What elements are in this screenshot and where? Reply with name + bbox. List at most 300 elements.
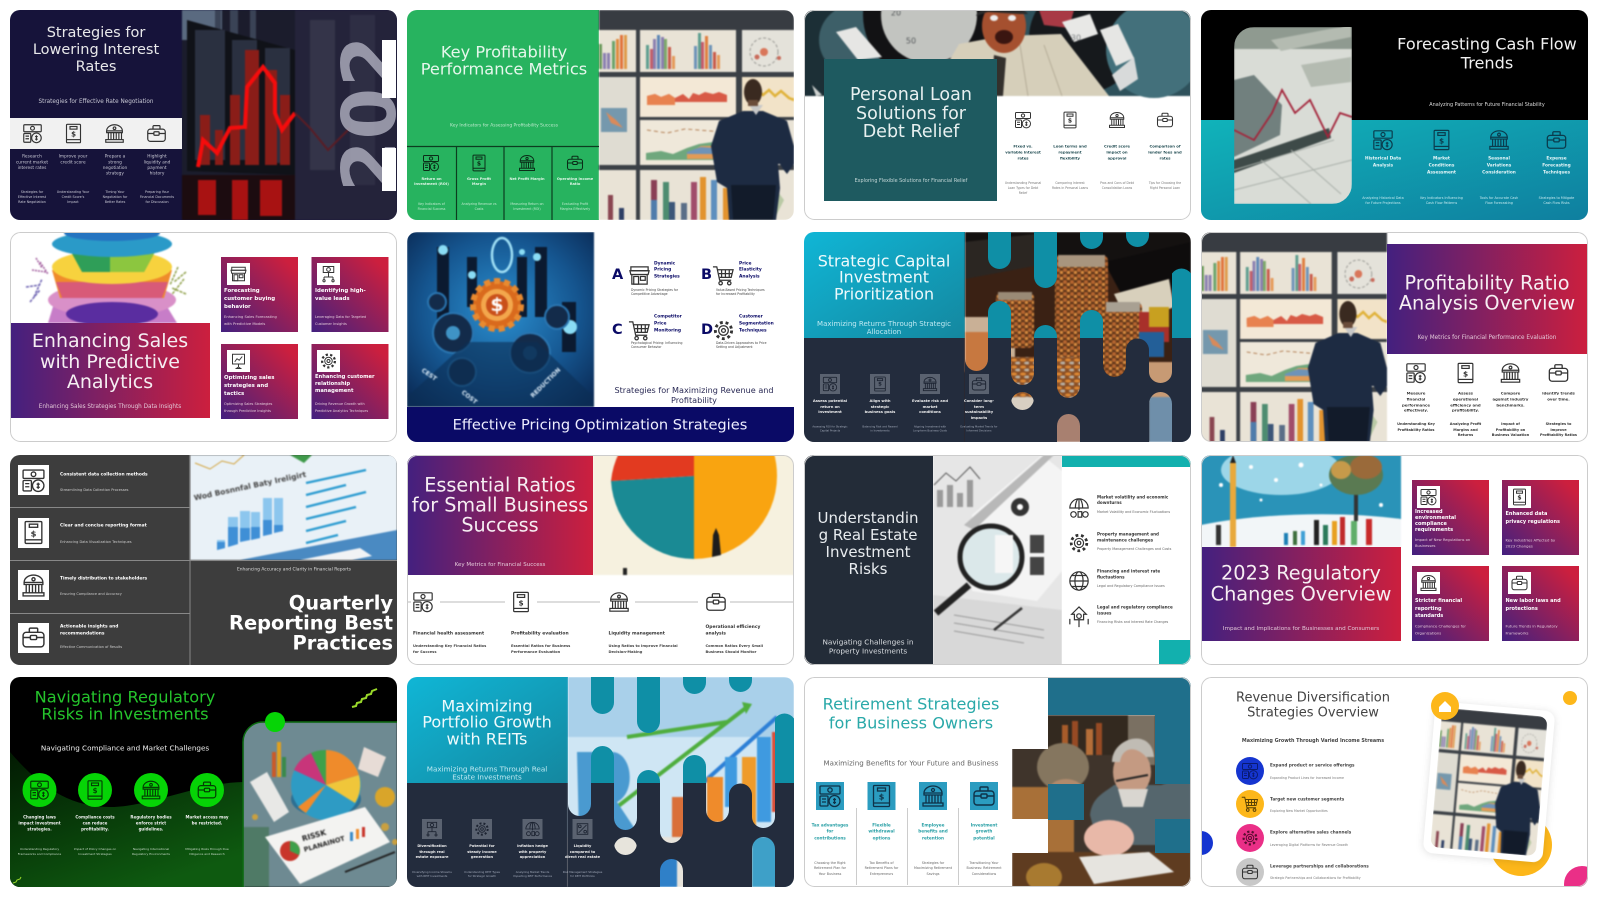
icon: book — [1458, 363, 1473, 383]
title: Prioritization — [834, 284, 934, 304]
icon: bank — [1501, 364, 1520, 382]
panel: 2023 Regulatory Changes Overview — [1201, 455, 1588, 665]
caption: Relief — [1019, 191, 1028, 195]
step: profitability — [511, 592, 570, 654]
timeline connectors — [407, 601, 794, 603]
item: access — [185, 773, 229, 856]
label: Analysis — [1373, 162, 1394, 168]
icon box — [522, 819, 542, 839]
caption — [1362, 196, 1404, 205]
icon: store — [630, 267, 649, 284]
icon: bank — [923, 786, 943, 806]
caption — [224, 402, 273, 413]
title: Debt Relief — [863, 122, 960, 142]
icon: money — [424, 156, 438, 171]
label: Measure — [1407, 390, 1426, 396]
label — [1506, 598, 1561, 612]
icon: briefcase — [198, 782, 216, 798]
icon: gear — [1244, 832, 1256, 844]
subtitle: Impact and Implications for Businesses and Consumers — [1223, 626, 1379, 632]
label — [971, 822, 997, 840]
panel: Effective Pricing Optimization Strategies — [407, 232, 794, 442]
caption: Financing Risks and Interest Rate Changes — [1097, 620, 1169, 624]
label: through real — [419, 850, 445, 854]
label: Monitoring — [654, 328, 681, 334]
icon: cart — [629, 322, 649, 340]
caption — [412, 870, 452, 878]
item: market — [1420, 130, 1463, 205]
item: employee — [914, 782, 953, 876]
label: be restricted. — [192, 820, 223, 826]
card: relationships — [312, 344, 388, 419]
caption — [315, 402, 368, 413]
icon box — [868, 782, 896, 810]
title: Practices — [293, 632, 393, 654]
caption: Predictive Analytics Techniques — [315, 409, 368, 413]
pill overlay — [568, 677, 794, 887]
caption: Retirement Plans for — [865, 866, 899, 870]
label: requirements — [1415, 527, 1453, 533]
item: withdrawal — [865, 782, 899, 876]
label — [315, 374, 375, 394]
caption: Understanding Key — [1397, 422, 1436, 426]
title: Navigating Regulatory — [35, 688, 216, 706]
icon: money — [820, 786, 840, 806]
icon: book — [88, 781, 102, 799]
label — [1148, 144, 1182, 160]
caption: Margins and — [1453, 428, 1478, 432]
title — [850, 85, 972, 142]
label: benefits and — [918, 828, 948, 834]
icon: money — [23, 470, 44, 491]
icon: money — [414, 593, 432, 612]
subtitle: Navigating Compliance and Market Challenges — [41, 744, 209, 752]
label: Align with — [870, 399, 891, 403]
card: optimizing — [221, 344, 298, 419]
caption: Choosing the Right — [814, 861, 846, 865]
caption: Profitability Ratios — [1540, 433, 1577, 437]
label: Techniques — [1543, 170, 1570, 176]
subtitle: Maximizing Benefits for Your Future and Business — [824, 758, 999, 768]
label — [18, 814, 61, 832]
subtitle: Navigating Challenges in — [822, 638, 914, 646]
caption: Measuring Return on — [510, 202, 544, 206]
label: repayment — [1058, 150, 1082, 154]
icon: briefcase — [568, 156, 582, 170]
icon box — [870, 374, 890, 394]
label — [868, 822, 895, 840]
label: downturns — [1097, 500, 1122, 505]
item: segments — [1236, 790, 1345, 818]
label — [59, 154, 88, 166]
item: income — [464, 819, 501, 878]
caption — [185, 847, 229, 856]
label: compared to — [570, 850, 596, 854]
title: with Predictive — [40, 351, 180, 373]
decorative circle: yellow dot — [1563, 691, 1577, 705]
caption — [716, 341, 767, 349]
icon: gear hand — [1071, 535, 1087, 551]
label: profitability. — [1452, 408, 1480, 412]
label: Enhanced data — [1506, 511, 1547, 517]
title: Profitability Ratio — [1404, 272, 1570, 294]
panel: Strategic Capital Investment Prioritization — [804, 232, 1191, 442]
caption: Competitive Advantage — [631, 292, 668, 296]
label: conditions — [919, 410, 942, 414]
label — [1542, 156, 1571, 176]
label: Improve your — [59, 154, 88, 160]
title: Effective Pricing Optimization Strategies — [453, 416, 747, 434]
label: Market — [1433, 156, 1450, 162]
label: Strategies — [654, 274, 680, 280]
caption: Analyzing Market Trends — [516, 870, 550, 874]
label: Regulatory bodies — [130, 814, 172, 820]
label: strong — [108, 160, 122, 166]
title: 2023 Regulatory — [1221, 562, 1381, 584]
icon: gear — [476, 823, 488, 835]
caption — [224, 315, 277, 326]
label: Variations — [1487, 162, 1512, 168]
icon box — [920, 374, 940, 394]
title: Quarterly — [289, 592, 393, 614]
subtitle: Strategies for Effective Rate Negotiation — [38, 99, 154, 105]
caption — [1415, 624, 1466, 636]
caption: Key Indicators Influencing — [1420, 196, 1463, 200]
letter: C — [612, 322, 623, 338]
icon: money — [1016, 112, 1030, 128]
item: research rates — [16, 125, 48, 204]
item: measure — [1397, 364, 1436, 432]
title — [412, 474, 588, 536]
label — [812, 822, 849, 840]
caption — [18, 847, 61, 856]
caption — [862, 424, 898, 432]
label: Compliance costs — [75, 814, 115, 820]
caption — [966, 861, 1002, 876]
caption: Understanding Your — [57, 190, 90, 194]
caption — [1479, 196, 1518, 205]
caption: Investment Strategies — [78, 852, 112, 856]
caption — [140, 190, 174, 204]
photo: bar chart report: Wod Bosnnfal Baty Ireligirt — [193, 470, 307, 502]
caption — [462, 202, 497, 211]
column dividers — [856, 808, 958, 885]
illustration: gears and dollar sign: $ — [490, 294, 504, 316]
label: enforce strict — [136, 820, 166, 826]
label — [1402, 390, 1430, 412]
caption: for REIT Portfolios — [570, 874, 595, 878]
caption — [513, 870, 552, 878]
photo: man viewing chart wall — [599, 10, 794, 220]
label: Margin — [472, 182, 487, 186]
caption: Cash Flow Patterns — [1426, 201, 1457, 205]
grid item B — [701, 260, 765, 296]
label: Return on — [421, 177, 442, 181]
label: rates — [1017, 156, 1029, 160]
caption: Impact of Policy Changes on — [74, 847, 116, 851]
icon: book — [514, 592, 528, 612]
title — [1211, 562, 1391, 606]
item: terms — [1052, 112, 1088, 190]
label: Explore alternative sales channels — [1270, 830, 1352, 834]
caption: 2023 Changes — [1506, 544, 1533, 548]
badge: house icon — [1431, 692, 1459, 720]
icon disc — [1236, 858, 1264, 886]
label: Highlight — [147, 154, 167, 160]
decorative circle: blue — [1189, 831, 1213, 855]
step: liquidity — [608, 593, 678, 654]
label: generation — [471, 855, 494, 859]
title: Enhancing Sales — [32, 330, 188, 352]
icon: bank — [1110, 113, 1124, 128]
label: Leverage partnerships and collaborations — [1270, 864, 1369, 868]
card: leads — [312, 257, 388, 332]
caption — [960, 424, 999, 432]
icon disc — [22, 773, 56, 807]
caption — [413, 644, 486, 654]
title: Rates — [76, 59, 116, 75]
caption: Navigating International — [133, 847, 169, 851]
icon box — [227, 263, 250, 285]
title — [35, 688, 216, 724]
photo: risk planning desk: RISSK — [301, 827, 328, 843]
label: sustainability — [965, 410, 994, 414]
label: Conditions — [1429, 162, 1455, 168]
caption — [1148, 181, 1181, 190]
caption: Effective Communication of Results — [60, 645, 122, 649]
caption: Strategies to Mitigate — [1539, 196, 1574, 200]
label — [654, 314, 683, 334]
illustration: gears and dollar sign: REDUCTION — [530, 367, 562, 399]
label — [103, 154, 128, 176]
label — [1097, 604, 1173, 616]
panel: Enhancing Sales with Predictive Analytics — [10, 232, 397, 442]
caption: Maximizing Retirement — [914, 866, 953, 870]
label: Evaluate risk and — [912, 399, 948, 403]
label: strategies and — [224, 383, 268, 389]
label: Investment (ROI) — [414, 182, 449, 186]
icon: house dollar — [1070, 607, 1088, 627]
icon: money — [24, 125, 41, 143]
caption: Investment (ROI) — [513, 207, 541, 211]
label: Forecasting — [1542, 162, 1571, 168]
divider lines — [10, 455, 397, 665]
icon: briefcase — [148, 126, 165, 141]
caption — [563, 870, 603, 878]
photo: red stock chart on monitor with city behind — [182, 10, 397, 220]
caption: Using Ratios to Improve Financial — [608, 644, 678, 648]
caption — [18, 190, 47, 204]
caption: Customer Insights — [315, 322, 347, 326]
caption: Understanding Personal — [1005, 181, 1041, 185]
label: Price — [654, 320, 666, 326]
panel: Forecasting Cash Flow Trends — [1201, 10, 1588, 220]
label: financial — [1407, 396, 1425, 402]
caption: Analyzing Profit — [1450, 422, 1482, 426]
icon disc — [190, 773, 224, 807]
label: retention — [922, 836, 944, 840]
subtitle: Key Metrics for Financial Success — [455, 562, 545, 568]
caption: Long-term Business Goals — [913, 428, 948, 432]
label: Tax advantages — [812, 822, 849, 828]
caption: Common Ratios Every Small — [706, 644, 763, 648]
label — [964, 399, 995, 420]
label: return on — [820, 405, 840, 409]
caption: Impact of — [1501, 422, 1520, 426]
label: relationship — [315, 381, 350, 387]
metric cell dividers — [407, 146, 599, 220]
label: Assess — [1458, 390, 1474, 396]
label — [1053, 144, 1087, 160]
photo: winter scene with giant pencil and people — [1201, 445, 1401, 547]
title: with REITs — [447, 730, 527, 748]
caption — [132, 847, 170, 856]
label: Stricter financial — [1415, 598, 1462, 604]
caption: Business Should Monitor — [706, 650, 757, 654]
panel: Key Profitability Performance Metrics — [407, 10, 794, 220]
caption — [1450, 422, 1482, 437]
grid item A — [612, 260, 680, 296]
label: profitability. — [81, 826, 109, 832]
subtitle: Enhancing Sales Strategies Through Data Insights — [39, 404, 181, 410]
caption: Rates in Personal Loans — [1052, 186, 1088, 190]
icon box — [317, 350, 340, 372]
item: net margin — [509, 156, 545, 211]
item: ROI — [414, 156, 449, 211]
title block — [824, 59, 997, 201]
label — [416, 844, 449, 859]
white geometric blocks — [1004, 705, 1048, 887]
caption: Strategies to — [1546, 422, 1572, 426]
label — [1415, 598, 1462, 619]
caption: Risk Management Strategies — [563, 870, 603, 874]
photo: coin jars on table — [965, 232, 1191, 442]
label — [1097, 532, 1159, 542]
label: Assess potential — [813, 399, 847, 403]
title: Solutions for — [856, 104, 967, 124]
caption: Evaluating Profit — [562, 202, 589, 206]
item: risk — [912, 374, 948, 432]
icon: money — [823, 377, 837, 391]
item: investment — [966, 782, 1002, 876]
label: Historical Data — [1365, 156, 1401, 162]
label — [1415, 509, 1456, 533]
label: steady income — [467, 850, 497, 854]
caption: Effective Interest — [18, 195, 47, 199]
caption: Dynamic Pricing Strategies for — [631, 288, 679, 292]
photo: risk planning desk: PLANAINOT — [303, 834, 346, 854]
subtitle: Estate Investments — [452, 772, 522, 782]
subtitle: Profitability — [671, 395, 717, 405]
caption: Pros and Cons of Debt — [1100, 181, 1135, 185]
label: Diversification — [417, 844, 447, 848]
label — [144, 154, 171, 176]
item: seasonal — [1479, 131, 1518, 205]
item: long-term — [960, 374, 999, 432]
step: financial health — [413, 593, 486, 654]
label: Changing laws — [23, 814, 57, 820]
label: value leads — [315, 296, 350, 302]
caption: Impacting REIT Performance — [513, 874, 552, 878]
icon: bank — [142, 781, 160, 799]
icon box — [422, 819, 442, 839]
label: Research — [22, 154, 42, 160]
caption: through Predictive Insights — [224, 409, 271, 413]
label: Net Profit Margin — [509, 177, 545, 181]
title — [229, 592, 393, 654]
title — [32, 330, 188, 393]
label — [1542, 390, 1576, 402]
icon: briefcase — [1242, 865, 1258, 879]
icon box — [1508, 486, 1531, 508]
label: Market access may — [186, 814, 229, 820]
subtitle: Key Metrics for Financial Performance Evaluation — [1418, 335, 1557, 341]
risk: property management — [1071, 532, 1172, 551]
icon box — [1508, 572, 1531, 594]
title — [818, 252, 950, 304]
icon: briefcase — [707, 594, 725, 610]
title — [823, 694, 999, 732]
photo: man viewing chart wall — [1201, 232, 1387, 442]
caption — [1506, 624, 1558, 636]
corner block — [1159, 640, 1191, 665]
caption — [1540, 422, 1577, 437]
caption: Profitability Ratios — [1397, 428, 1435, 432]
framed photo: man viewing chart wall — [1423, 701, 1555, 863]
caption — [1415, 538, 1471, 548]
caption — [1397, 422, 1436, 432]
caption: Profitability on — [1496, 428, 1526, 432]
panel: Maximizing Portfolio Growth with REITs — [407, 677, 794, 887]
title: Key Profitability — [441, 42, 568, 62]
label: analysis — [706, 630, 726, 636]
caption: Key Indicators of — [418, 202, 446, 206]
label: Comparison of — [1150, 144, 1181, 148]
subtitle: Property Investments — [829, 646, 907, 656]
title: g Real Estate — [819, 526, 917, 544]
title block — [804, 455, 933, 665]
caption — [716, 288, 765, 296]
title block — [10, 323, 210, 418]
caption — [511, 644, 570, 654]
label: Seasonal — [1488, 156, 1510, 162]
caption: for Increased Profitability — [716, 292, 755, 296]
label: Customer — [739, 314, 764, 320]
label: performance — [1402, 402, 1430, 408]
caption: Strategies for — [21, 190, 44, 194]
title: Strategies Overview — [1247, 706, 1379, 720]
label — [739, 260, 762, 280]
caption — [1539, 196, 1574, 205]
icon: book — [875, 377, 885, 391]
label: issues — [1097, 610, 1112, 616]
item: fees — [1148, 113, 1182, 190]
illustration: gears and dollar sign: CEST — [420, 367, 439, 383]
label — [813, 399, 847, 414]
caption: Financial Documents — [140, 195, 174, 199]
label — [16, 154, 48, 171]
icon disc — [1236, 824, 1264, 852]
caption: Understanding Regulatory — [20, 847, 59, 851]
label — [467, 844, 497, 859]
photo: couple with piggy bank — [1012, 715, 1191, 891]
label — [186, 814, 229, 826]
pill overlay — [965, 232, 1191, 442]
card: labor laws — [1502, 566, 1579, 641]
illustration: gears and dollar sign — [407, 232, 594, 407]
risk: volatility — [1070, 494, 1170, 517]
icon: bank — [1490, 131, 1508, 149]
